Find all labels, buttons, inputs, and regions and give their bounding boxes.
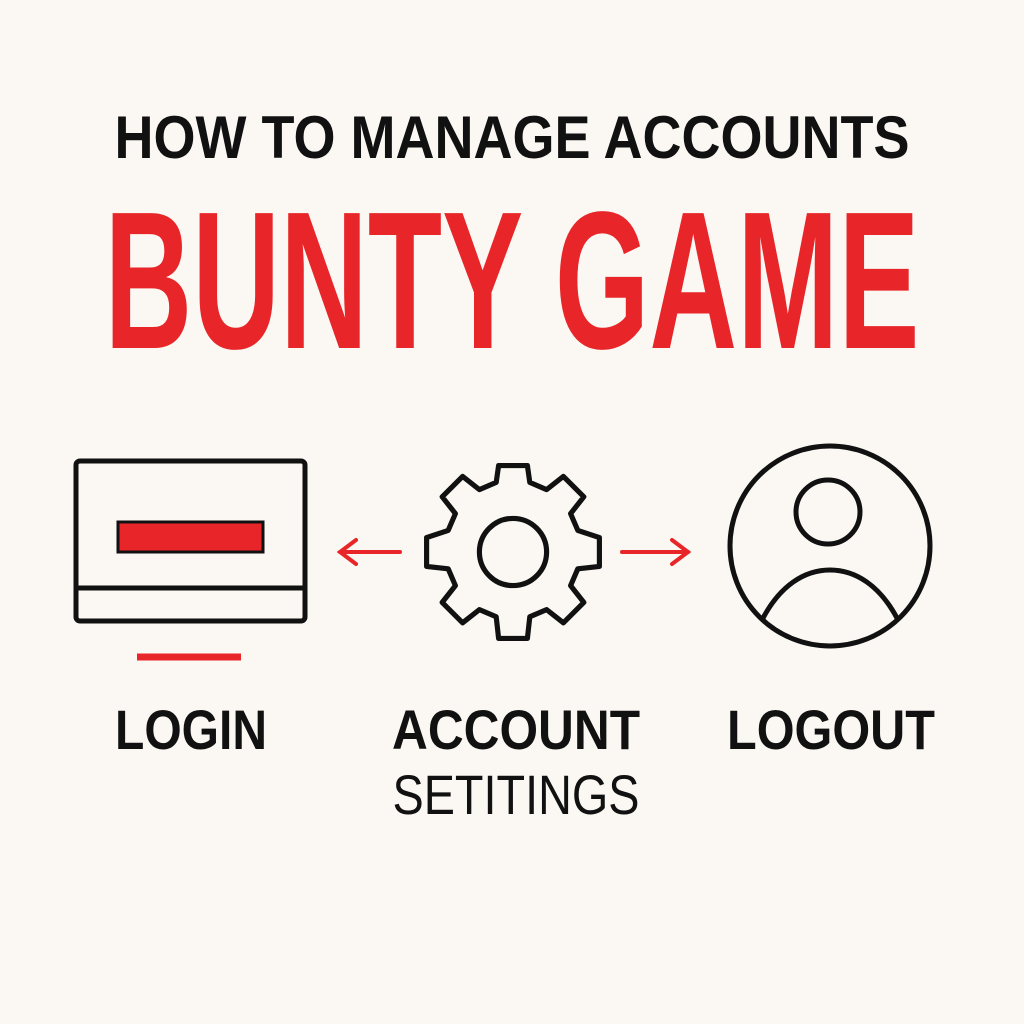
label: account settings: SETITINGS [392,763,640,826]
label: logout: LOGOUT [727,698,935,761]
label: login: LOGIN [115,698,267,761]
arrow: right [622,540,688,564]
icon: gear [427,466,599,638]
label: account settings [392,698,640,826]
title: HOW TO MANAGE ACCOUNTS [114,104,910,171]
label: account settings: ACCOUNT [392,698,640,761]
icon: login monitor [76,461,305,657]
arrow: left [340,540,400,564]
icon: user avatar [730,446,930,646]
